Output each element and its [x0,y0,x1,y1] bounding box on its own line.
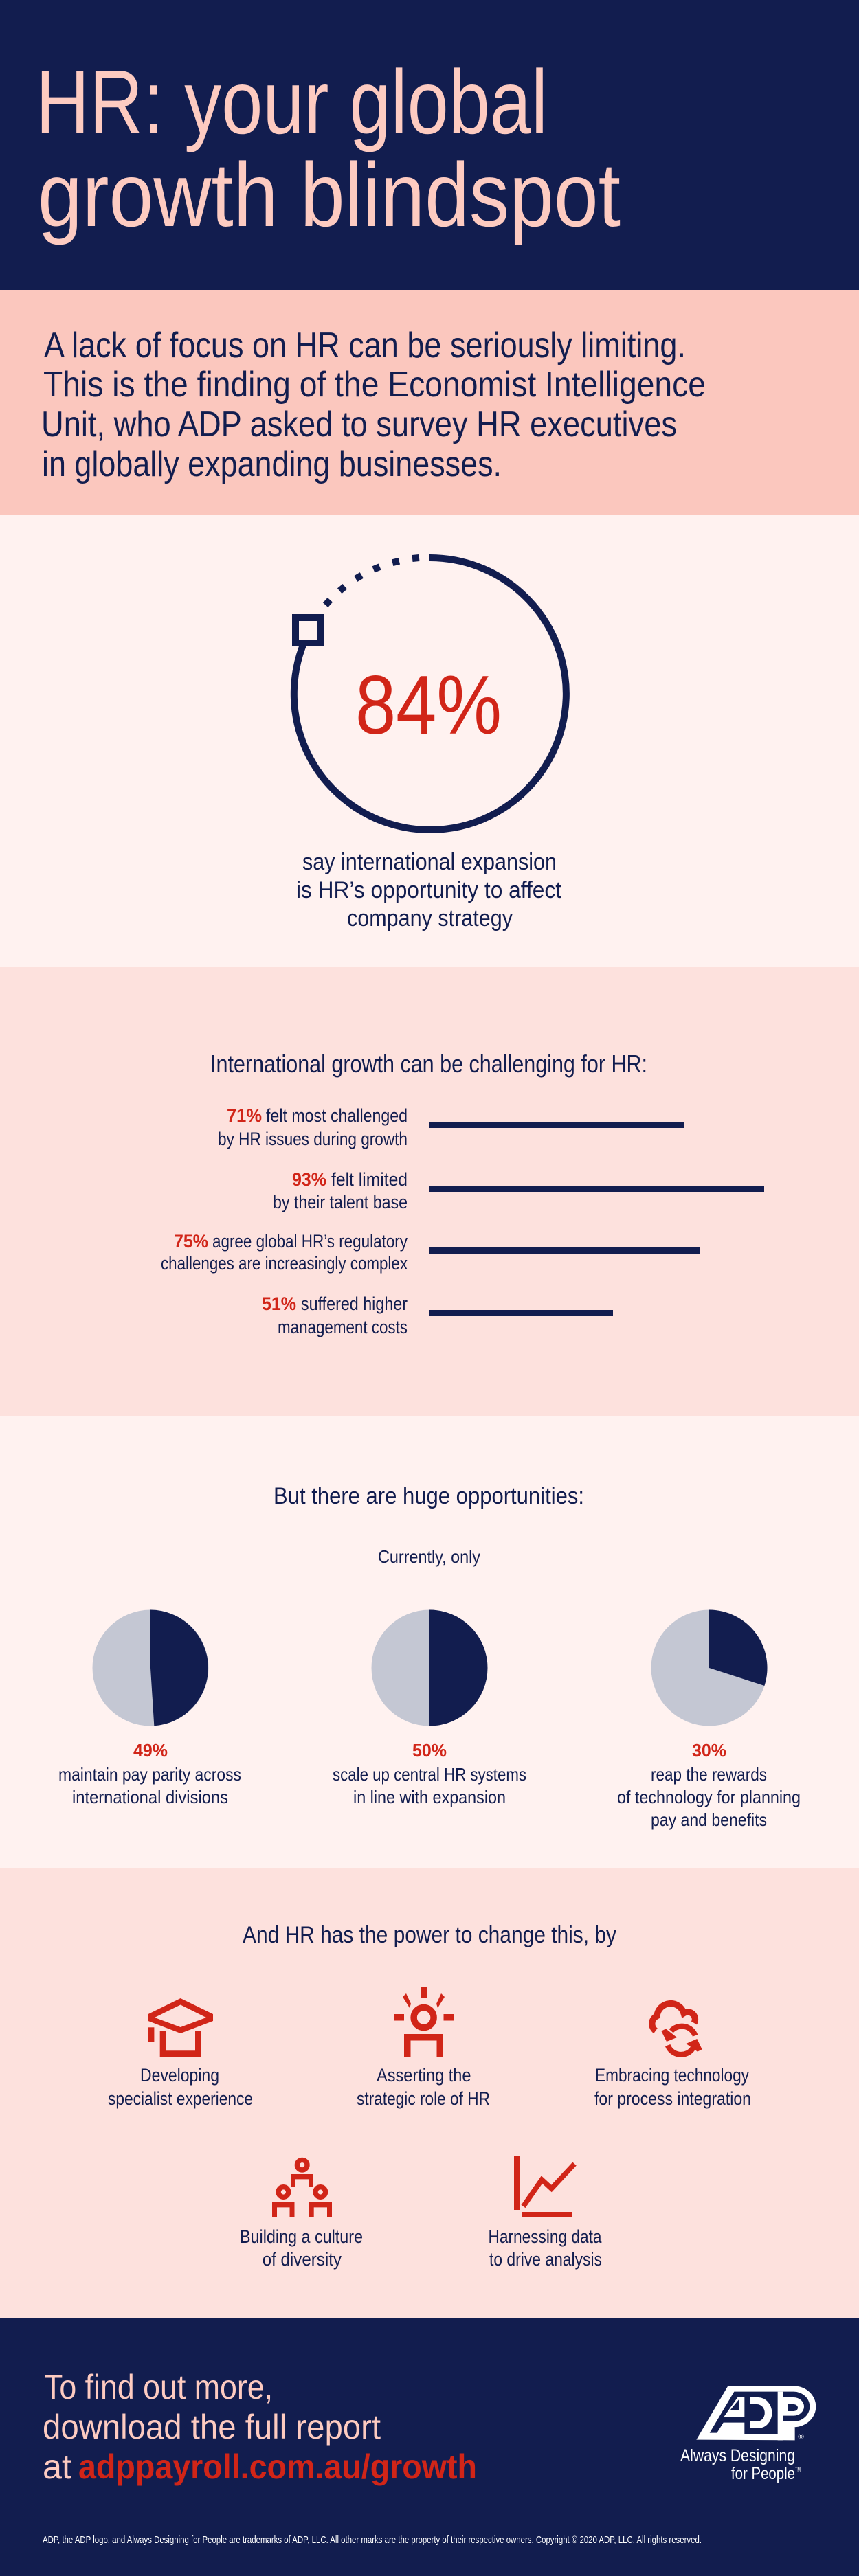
text block: stat description: company strategy [347,905,513,931]
label: 50%: in line with expansion [353,1787,506,1807]
text block: introduction: in globally expanding businesses. [42,444,502,484]
text block: stat description: is HR’s opportunity to affect [296,877,562,903]
text block: call to action [43,2368,477,2486]
label: 30%: pay and benefits [651,1809,767,1830]
icon: cloud sync [652,2004,702,2055]
text: embracing: for process integration [594,2088,751,2109]
text: developing: Developing [140,2065,219,2086]
bar row: 51%: management costs [278,1317,408,1337]
logo: ADP [680,2386,816,2483]
icon: line chart [514,2156,574,2217]
label: 49%: maintain pay parity across [58,1764,241,1785]
text: diversity: Building a culture [240,2226,363,2247]
text block: introduction [41,326,706,484]
heading: title: HR: your global [36,52,548,152]
heading: title [36,52,621,245]
bar row: 93%: felt limited [331,1169,408,1190]
text: legal notice: ADP, the ADP logo, and Always Designing for People are trademarks of ADP, LLC. All other marks are the property of their respective owners. Copyright © 2020 ADP, LLC. All rights reserved. [43,2535,702,2546]
text: asserting: Asserting the [377,2065,471,2086]
pie chart: 49% [92,1610,209,1726]
chart: 84% ring [294,554,566,830]
icon: graduation cap [148,1998,213,2057]
label: 50%: scale up central HR systems [333,1764,526,1785]
label: 49%: 49% [133,1740,168,1761]
text: harnessing [488,2226,602,2270]
text block: call to action: adppayroll.com.au/growth [78,2448,477,2486]
panel: actions [0,1868,859,2318]
bar row: 51% [262,1293,613,1337]
bar row: 75%: 75% [174,1231,208,1252]
text block: stat description: say international expansion [302,849,557,875]
text: harnessing: to drive analysis [489,2249,602,2270]
pie chart: 50% [371,1610,488,1726]
text block: introduction: Unit, who ADP asked to survey HR executives [41,405,677,444]
panel: challenges [0,967,859,1416]
text: asserting [357,2065,490,2109]
text: embracing [594,2065,751,2109]
bar row: 93%: by their talent base [273,1192,408,1212]
bar row: 71%: felt most challenged [266,1105,408,1126]
text block: call to action: at [43,2448,71,2486]
text block: call to action: To find out more, [44,2368,273,2406]
bar row: 51%: suffered higher [301,1293,408,1314]
heading: opportunities: But there are huge opportunities: [274,1483,584,1509]
text block: introduction: A lack of focus on HR can be seriously limiting. [44,326,686,365]
number: 84%: 84% [355,658,502,752]
text: harnessing: Harnessing data [488,2226,602,2247]
text: diversity [240,2226,363,2270]
icon: person with light [394,1987,454,2057]
heading: title: growth blindspot [38,144,621,245]
bar row: 75%: challenges are increasingly complex [161,1253,408,1274]
label: 30%: 30% [692,1740,726,1761]
label: 30%: reap the rewards [651,1764,767,1785]
logo: ADP: TM [795,2466,801,2473]
logo: ADP: ® [798,2433,804,2441]
label: 30%: of technology for planning [617,1787,801,1807]
text: embracing: Embracing technology [595,2065,749,2086]
logo: ADP: Always Designing [680,2446,795,2465]
bar row: 71% [218,1105,684,1149]
bar row: 75%: agree global HR’s regulatory [212,1231,408,1252]
text: developing [108,2065,253,2109]
bar row: 71%: 71% [227,1105,262,1126]
text block: call to action: download the full report [43,2408,381,2446]
label: 50% [333,1740,526,1807]
text block: stat description [296,849,562,931]
text block: introduction: This is the finding of the Economist Intelligence [43,365,706,405]
panel: 84% stat [0,515,859,967]
text: asserting: strategic role of HR [357,2088,490,2109]
heading: challenges: International growth can be challenging for HR: [210,1050,647,1078]
heading: actions: And HR has the power to change this, by [243,1922,616,1948]
icon: people hierarchy [272,2160,332,2217]
bar row: 93%: 93% [292,1169,326,1190]
label: 49%: international divisions [72,1787,228,1807]
panel: opportunities [0,1416,859,1868]
bar row: 71%: by HR issues during growth [218,1129,408,1149]
pie chart: 30% [651,1610,767,1726]
panel: title [0,0,859,290]
label: 30% [617,1740,801,1830]
panel: footer [0,2318,859,2576]
bar row: 51%: 51% [262,1293,296,1314]
panel: introduction [0,290,859,515]
logo: ADP: for People [731,2464,795,2483]
bar row: 75% [161,1231,700,1274]
text: currently only: Currently, only [378,1546,480,1567]
text: developing: specialist experience [108,2088,253,2109]
text: diversity: of diversity [263,2249,342,2270]
label: 50%: 50% [412,1740,447,1761]
label: 49% [58,1740,241,1807]
bar row: 93% [273,1169,764,1212]
